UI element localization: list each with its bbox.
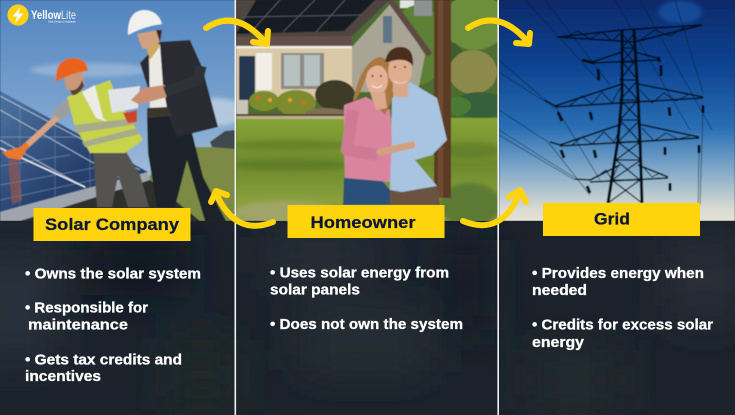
photo: transmission tower at dusk — [499, 0, 735, 221]
logo: YellowLite — [7, 4, 77, 26]
heading: Solar Company: Solar Company — [45, 215, 180, 234]
text: grid bullets: needed — [532, 282, 587, 299]
arrow: homeowner back to solar company — [211, 191, 273, 226]
couple — [343, 47, 447, 205]
arrow: grid to homeowner — [463, 190, 526, 225]
text: homeowner bullets: • Uses solar energy from — [270, 264, 449, 282]
text: solar company bullets: • Owns the solar system — [25, 266, 201, 282]
utility pole — [414, 0, 451, 198]
text: homeowner bullets — [270, 264, 463, 333]
text: solar company bullets: • Gets tax credits and — [25, 352, 182, 368]
text: solar company bullets: incentives — [25, 368, 101, 385]
heading: Homeowner: Homeowner — [310, 213, 416, 232]
text: grid bullets: • Provides energy when — [532, 265, 704, 282]
photo: homeowners and house — [230, 0, 507, 227]
dividers — [234, 0, 499, 415]
photo: solar company workers — [0, 0, 245, 221]
logo: YellowLite: Yellow — [31, 8, 62, 22]
text: grid bullets — [532, 265, 713, 351]
heading: Grid — [543, 203, 700, 236]
arrow: homeowner to grid — [468, 20, 530, 44]
heading: Solar Company — [34, 208, 190, 241]
worker in dark suit with white helmet — [128, 10, 226, 221]
logo: YellowLite: Lite — [61, 8, 76, 22]
heading: Grid: Grid — [594, 210, 630, 228]
house — [236, 0, 430, 114]
arrow: solar company to homeowner — [206, 21, 268, 44]
text: solar company bullets: • Responsible for — [25, 300, 148, 316]
text: homeowner bullets: solar panels — [270, 282, 360, 298]
worker with orange helmet — [2, 58, 149, 207]
text: solar company bullets — [25, 266, 201, 385]
text: solar company bullets: maintenance — [28, 316, 128, 334]
garden bushes — [236, 80, 355, 118]
heading: Homeowner — [288, 205, 444, 238]
panel: dark lower background — [0, 234, 735, 362]
text: grid bullets: energy — [532, 334, 585, 351]
logo: YellowLite: Solar Design & Installation — [48, 20, 77, 24]
text: homeowner bullets: • Does not own the system — [270, 316, 463, 333]
text: grid bullets: • Credits for excess solar — [532, 316, 713, 334]
